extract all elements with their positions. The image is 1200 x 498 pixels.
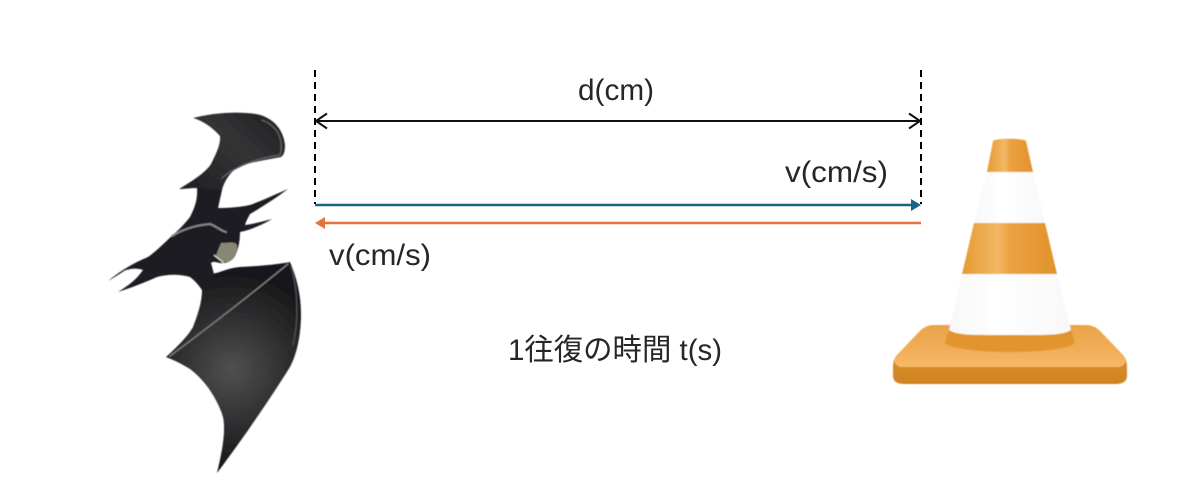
cone white upper stripe (974, 172, 1045, 223)
cone base (893, 325, 1127, 384)
label: distance: d(cm) (578, 74, 654, 107)
bat lower wing (166, 262, 301, 473)
label: round trip time: 1往復の時間 t(s) (508, 334, 722, 367)
bat upper wing (179, 113, 285, 208)
cone orange middle stripe (962, 223, 1057, 274)
icon: bat (108, 113, 301, 473)
arrow: distance d (316, 114, 920, 128)
label: returning velocity: v(cm/s) (329, 239, 431, 272)
cone bottom band (945, 330, 1075, 352)
right dashed guide (920, 70, 922, 204)
arrow: outgoing velocity (315, 199, 921, 211)
label: outgoing velocity: v(cm/s) (785, 156, 888, 189)
icon: traffic cone (893, 139, 1127, 384)
arrow: returning velocity (315, 217, 921, 229)
cone orange top (987, 139, 1033, 172)
bat wing highlights (170, 120, 297, 356)
bat face (216, 242, 237, 262)
left dashed guide (314, 70, 316, 204)
bat body and head (108, 188, 288, 292)
cone white lower stripe (949, 274, 1071, 335)
